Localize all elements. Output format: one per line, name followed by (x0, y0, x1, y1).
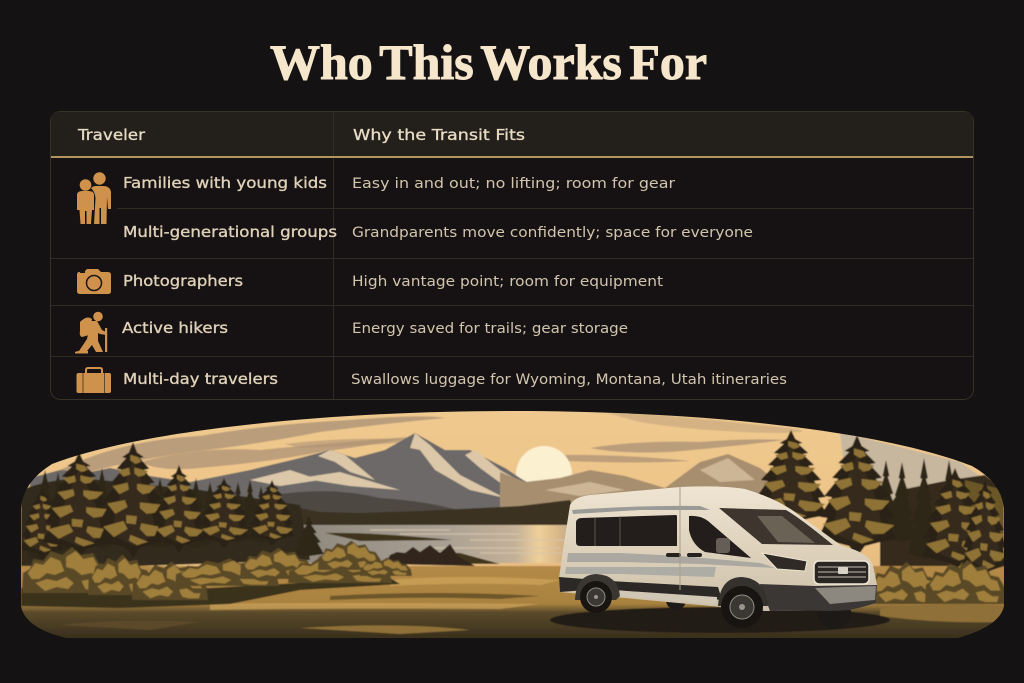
van bumper (760, 584, 877, 611)
landscape illustration (20, 410, 1008, 641)
panel: traveler table (50, 112, 974, 400)
row: photographers (123, 272, 663, 290)
row: active hikers: Active hikers (122, 319, 228, 337)
row: multi-day travelers (123, 370, 787, 388)
row: families with young kids: Families with young kids (123, 174, 327, 192)
illustration: white transit van (559, 486, 877, 629)
row: active hikers (122, 319, 628, 337)
front wheel (718, 577, 768, 628)
foreground pines left (21, 442, 324, 560)
clouds (60, 412, 980, 501)
van grille (814, 561, 869, 584)
small island trees (385, 544, 475, 566)
icon: camera (77, 269, 111, 294)
van windows (576, 508, 833, 558)
rear wheel (575, 574, 620, 613)
background trees left (42, 468, 264, 500)
title: Who This Works For (270, 34, 707, 90)
foreground pines right (755, 430, 1008, 580)
table header: Why the Transit Fits (353, 126, 525, 144)
row: multi-generational groups: Multi-generational groups (123, 223, 337, 241)
dark forest mass left (21, 479, 310, 570)
row: active hikers: Energy saved for trails; gear storage (352, 321, 628, 337)
van headlight (762, 553, 807, 571)
row: photographers: High vantage point; room for equipment (352, 274, 663, 290)
icon: family (77, 172, 111, 224)
ground (20, 566, 1005, 641)
icon: sun (516, 446, 572, 482)
mountains (30, 432, 768, 514)
icon: suitcase (76, 368, 111, 393)
row: multi-generational groups: Grandparents move confidently; space for everyone (352, 225, 753, 241)
table header (77, 126, 525, 144)
row: multi-generational groups (123, 223, 753, 241)
row: families with young kids (123, 174, 675, 192)
row: families with young kids: Easy in and out; no lifting; room for gear (352, 176, 675, 192)
icon: hiker (75, 312, 107, 354)
lake (288, 525, 573, 563)
shadow under left shrubs (21, 578, 400, 608)
row: multi-day travelers: Multi-day travelers (123, 370, 278, 388)
far right forest mass (879, 474, 998, 567)
row: multi-day travelers: Swallows luggage for Wyoming, Montana, Utah itineraries (351, 372, 787, 388)
table header: Traveler (77, 126, 146, 144)
van shadow (550, 607, 890, 633)
shrubs (22, 541, 1007, 604)
distant treeline (285, 500, 580, 526)
row: photographers: Photographers (123, 272, 243, 290)
